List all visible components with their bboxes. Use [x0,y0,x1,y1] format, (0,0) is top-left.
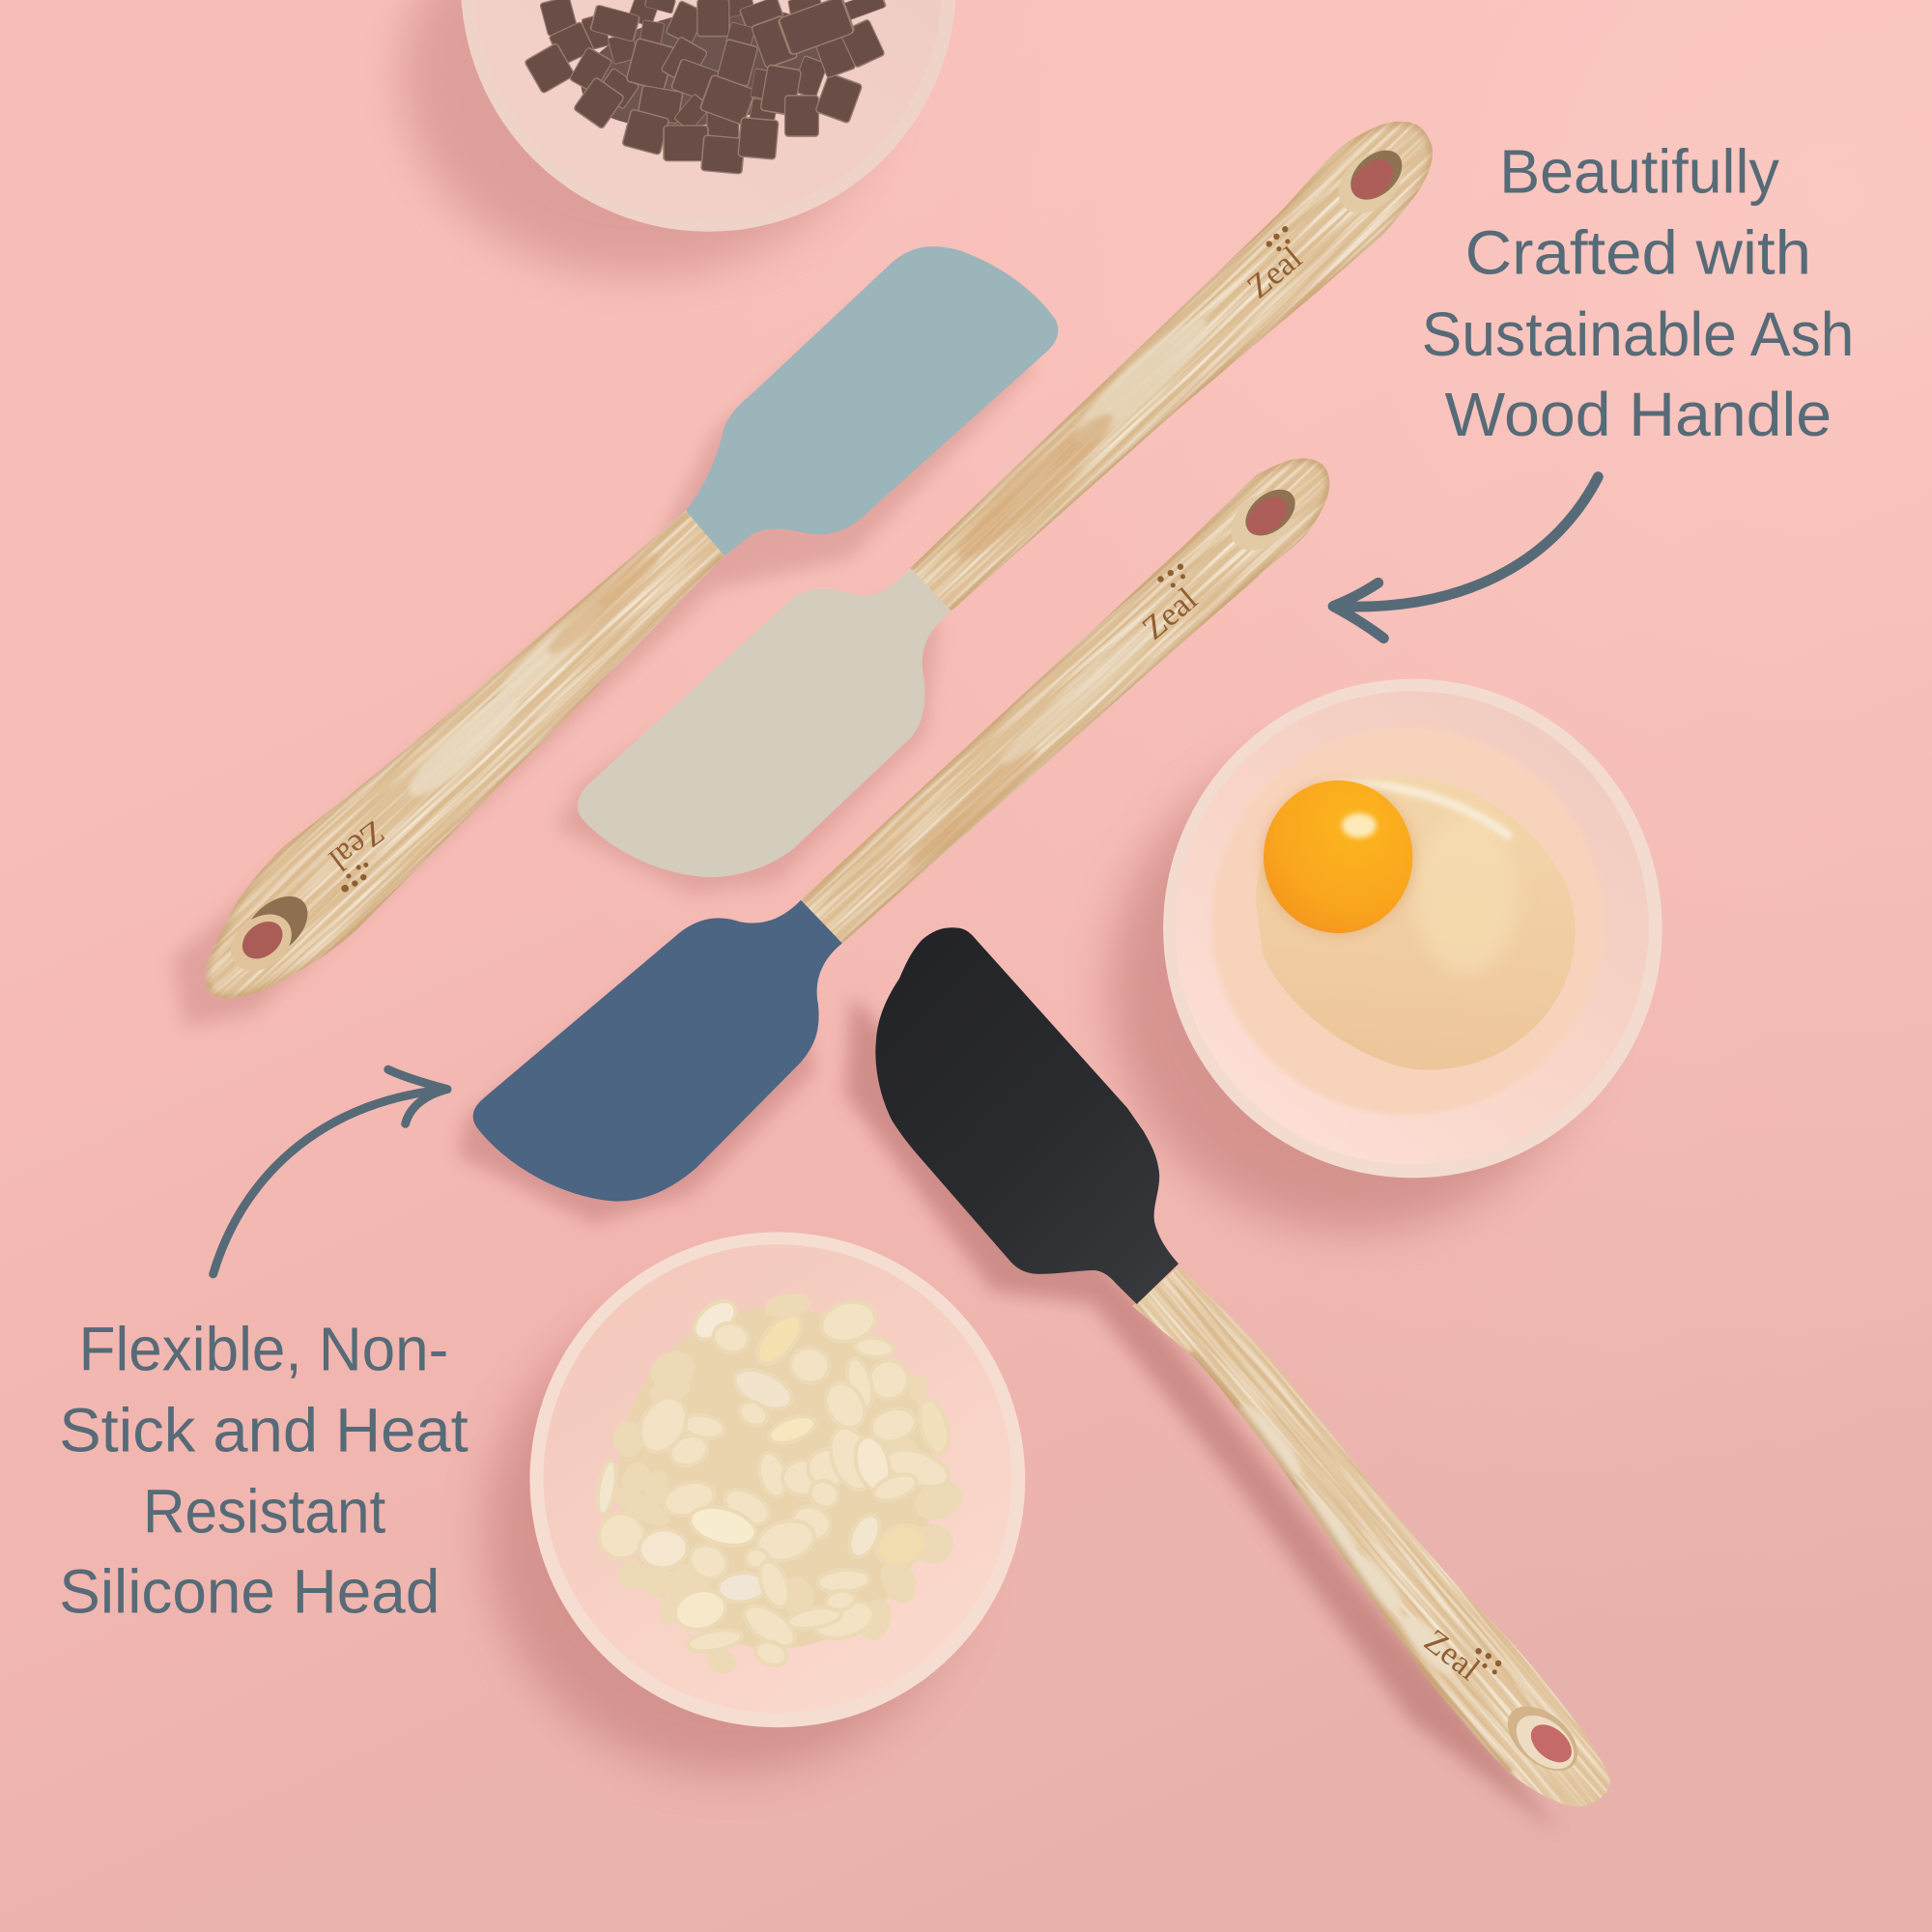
cream silicone head [578,568,952,877]
callout text: silicone head: Stick and Heat [59,1396,469,1465]
callout text: ash wood handle [1422,136,1854,449]
spatula: light blue head with ash handle [171,246,1059,1028]
handle hole [1326,139,1414,225]
spatula: black head with ash handle [838,927,1610,1824]
engraved logo: Zeal [1417,1622,1487,1688]
handle hole [220,885,319,982]
bowl: chocolate chunks [401,0,956,277]
ash handle [801,458,1329,943]
flaked almonds [590,1293,965,1675]
engraved logo: Zeal [1135,581,1205,647]
ash handle [910,122,1433,611]
callout text: silicone head [59,1314,469,1627]
spatula: dark blue head with ash handle [458,383,1407,1224]
callout text: ash wood handle: Sustainable Ash [1422,299,1854,369]
egg yolk [1262,781,1414,934]
egg white highlight [1328,783,1508,836]
callout text: ash wood handle: Wood Handle [1445,380,1832,449]
bowl: egg [1109,679,1662,1233]
egg white bright patch [1414,813,1518,974]
engraved logo: Zeal [1240,240,1309,305]
arrow: pointing to wood handle [1333,477,1598,639]
callout text: ash wood handle: Crafted with [1465,218,1811,288]
black silicone head [875,927,1179,1304]
handle hole [1219,480,1304,562]
light blue silicone head [686,246,1058,555]
bowl: flaked almonds [486,1233,1025,1775]
ash handle [205,510,724,999]
chocolate chunks [525,0,886,174]
callout text: ash wood handle: Beautifully [1499,136,1779,206]
dark blue silicone head [473,900,842,1202]
engraved logo: Zeal [322,813,391,878]
callout text: silicone head: Flexible, Non- [79,1314,448,1383]
ash handle [1132,1267,1610,1806]
dense egg white [1256,776,1576,1070]
arrow: pointing to silicone head [213,1069,447,1274]
liquid egg white [1211,728,1603,1115]
callout text: silicone head: Silicone Head [59,1557,440,1627]
handle hole [1495,1693,1590,1783]
callout text: silicone head: Resistant [143,1477,385,1547]
spatula: cream head with ash handle [557,23,1526,895]
